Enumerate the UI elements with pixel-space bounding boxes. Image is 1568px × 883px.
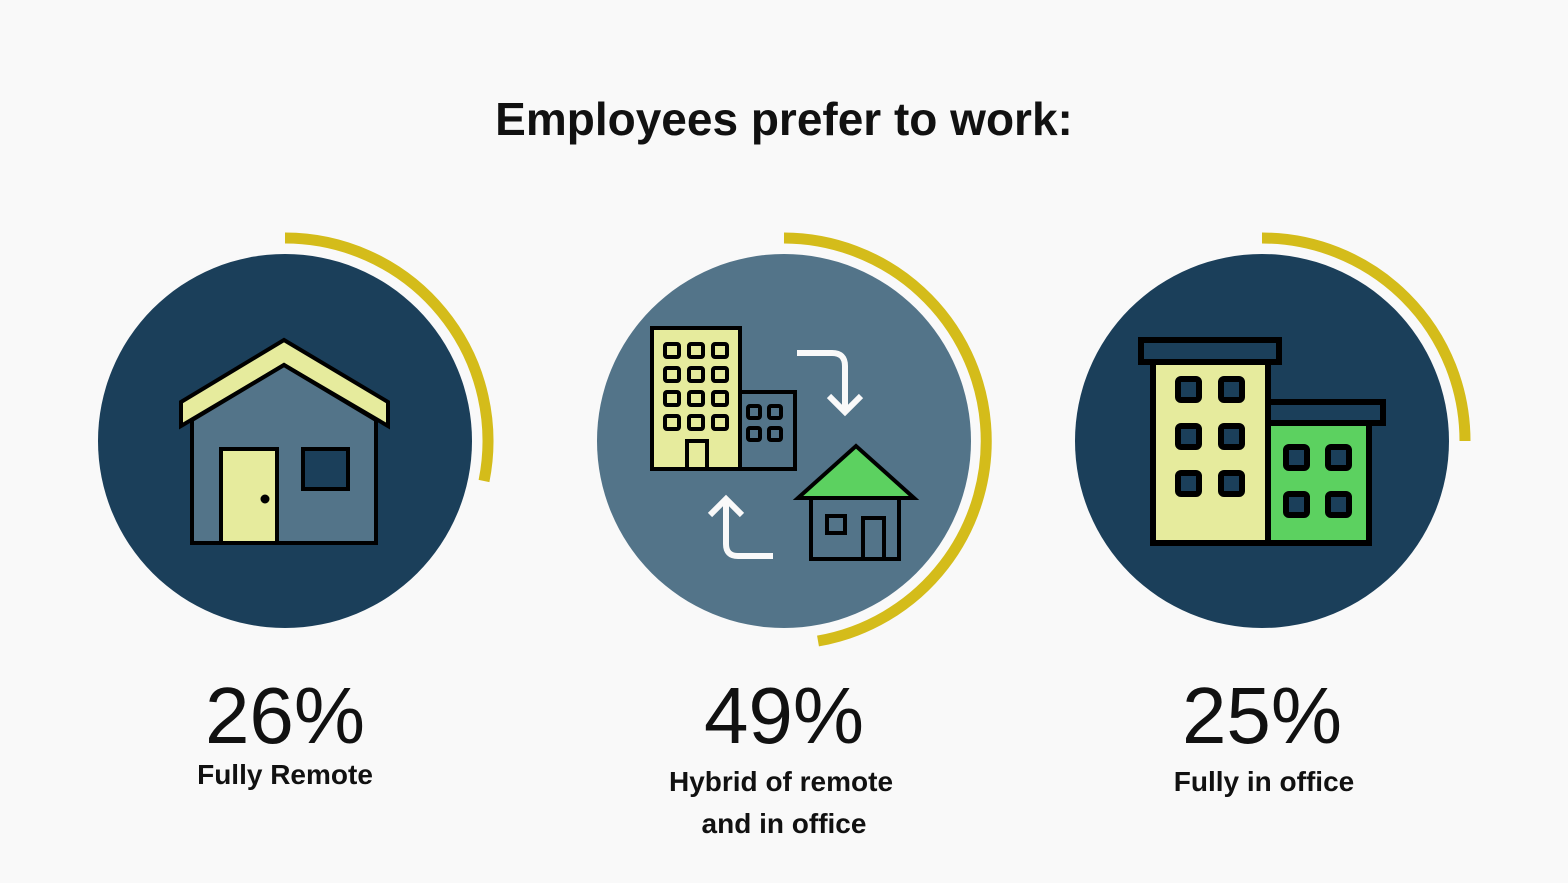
icon: office and home with arrows bbox=[652, 328, 914, 559]
percentage: 26% bbox=[205, 671, 365, 760]
icon: office buildings bbox=[1141, 340, 1383, 543]
percentage: 49% bbox=[704, 671, 864, 760]
circle background bbox=[1075, 254, 1449, 628]
circle background bbox=[98, 254, 472, 628]
label: Fully in office bbox=[1174, 766, 1354, 797]
progress arc 26% bbox=[285, 238, 488, 481]
label: Fully Remote bbox=[197, 759, 373, 790]
panel: fully in office bbox=[1075, 238, 1465, 797]
icon: house bbox=[181, 340, 388, 543]
progress arc 25% bbox=[1262, 238, 1465, 441]
progress arc 49% bbox=[784, 238, 986, 641]
panel: hybrid bbox=[597, 238, 986, 797]
percentage: 25% bbox=[1182, 671, 1342, 760]
panel: fully remote bbox=[98, 238, 488, 790]
label line 2: and in office bbox=[702, 808, 866, 839]
title: Employees prefer to work: bbox=[495, 93, 1073, 145]
circle background bbox=[597, 254, 971, 628]
label: Hybrid of remote bbox=[669, 766, 893, 797]
